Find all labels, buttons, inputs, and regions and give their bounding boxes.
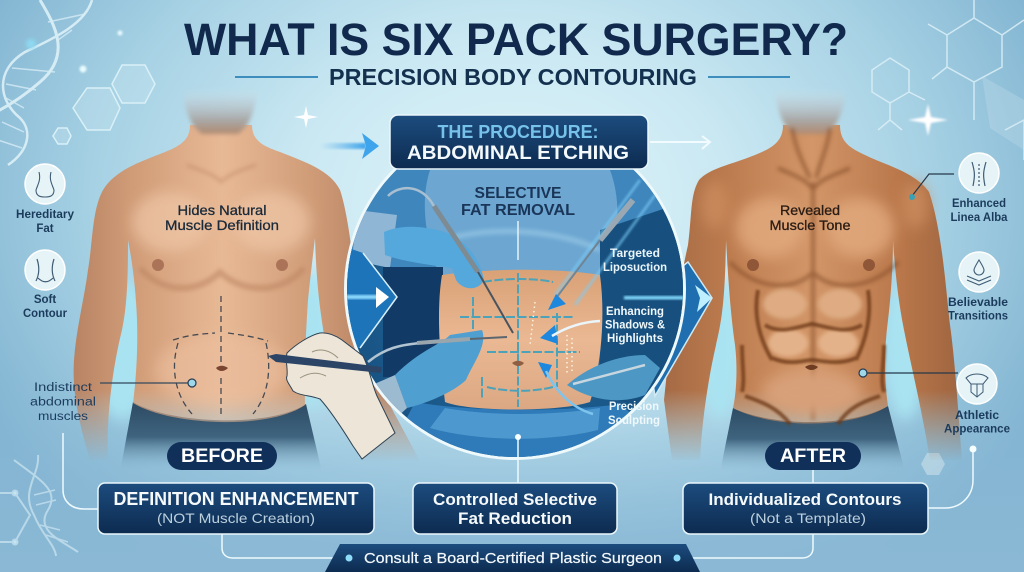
after: pants (720, 406, 905, 472)
decoration: dna helix bottom left (0, 455, 78, 556)
box: controlled selective fat reduction: Fat Reduction (458, 510, 572, 528)
left callout: soft contour: Contour (23, 308, 68, 320)
box: controlled selective fat reduction: Controlled Selective (433, 491, 597, 509)
procedure circle (344, 168, 686, 460)
procedure: pointer arrows (538, 294, 600, 414)
before: body (74, 125, 420, 462)
before badge: BEFORE (181, 446, 263, 467)
footer bar: consult surgeon (325, 544, 700, 572)
before: pants (120, 402, 322, 472)
procedure: gloved hands (384, 227, 484, 288)
decoration: glowing dots (80, 30, 122, 72)
enhancing shadows label: Shadows & (605, 318, 665, 332)
right callout: athletic appearance: Appearance (944, 424, 1010, 436)
arrow: before to procedure (320, 133, 379, 159)
box: individualized contours: Individualized Contours (708, 491, 902, 509)
footer bar: consult surgeon: Consult a Board-Certified Plastic Surgeon (364, 551, 662, 567)
arrow: procedure to after chevron (640, 262, 712, 396)
after badge: AFTER (780, 446, 846, 467)
after torso label: Revealed (780, 202, 840, 218)
before torso label: Hides Natural (178, 202, 266, 218)
enhancing shadows label: Enhancing (606, 304, 664, 318)
after: chin (775, 88, 845, 134)
title: WHAT IS SIX PACK SURGERY? (184, 14, 848, 65)
before: dashed surgical markings (173, 296, 269, 415)
right callout: enhanced linea alba: Enhanced (952, 198, 1006, 210)
left callout: hereditary fat: Hereditary (16, 209, 75, 221)
precision sculpting label: Precision (609, 399, 659, 413)
subtitle: PRECISION BODY CONTOURING (329, 64, 697, 90)
precision sculpting label: Sculpting (608, 413, 660, 427)
left callout: soft contour (23, 250, 68, 320)
box: definition enhancement: (NOT Muscle Creation) (157, 510, 315, 526)
after: chest and neck lines (730, 128, 898, 420)
selective fat removal label: SELECTIVE (474, 185, 562, 202)
procedure heading (390, 115, 648, 169)
box: individualized contours: (Not a Template) (750, 510, 866, 526)
left callout: soft contour: Soft (34, 294, 56, 306)
right callout: believable transitions (948, 252, 1008, 322)
targeted liposuction label: Liposuction (603, 260, 667, 274)
left callout: hereditary fat (16, 164, 75, 235)
after torso label: Muscle Tone (770, 217, 851, 233)
before torso label: Muscle Definition (165, 217, 279, 233)
procedure: light beams (555, 180, 655, 305)
procedure: abdomen (439, 270, 602, 410)
targeted liposuction label: Targeted (610, 246, 660, 260)
left callout: hereditary fat: Fat (36, 223, 54, 235)
after torso figure (664, 88, 962, 472)
left callout: indistinct abdominal muscles: Indistinct (34, 382, 93, 394)
left callout: indistinct abdominal muscles: abdominal (30, 396, 96, 408)
decoration: dna helix top left (0, 0, 92, 165)
procedure: instruments (388, 188, 434, 206)
selective fat removal label (461, 185, 575, 260)
box: controlled selective fat reduction (413, 483, 617, 534)
procedure: right beam (624, 296, 694, 300)
before badge (167, 442, 277, 470)
after: abdominal muscles (742, 289, 884, 424)
decoration: hexagons left (53, 65, 155, 144)
box: definition enhancement (98, 483, 374, 534)
box: individualized contours (683, 483, 928, 534)
right callout: athletic appearance (859, 364, 1010, 436)
decoration: sparkle left (294, 106, 318, 128)
selective fat removal label: FAT REMOVAL (461, 202, 575, 219)
right callout: believable transitions: Transitions (948, 310, 1008, 322)
left callout: indistinct abdominal muscles: muscles (38, 411, 88, 423)
gloved hand with marking pen (268, 333, 395, 459)
procedure: lower drape (407, 404, 630, 457)
connector lines (63, 433, 976, 558)
procedure heading: ABDOMINAL ETCHING (407, 143, 629, 164)
arrow: heading to right (650, 136, 710, 149)
box: definition enhancement: DEFINITION ENHANCEMENT (114, 489, 359, 509)
right callout: athletic appearance: Athletic (955, 410, 1000, 422)
procedure: gown (348, 170, 682, 267)
right callout: enhanced linea alba (909, 153, 1008, 224)
after badge (765, 442, 861, 470)
before torso figure (74, 88, 420, 472)
right callout: believable transitions: Believable (948, 297, 1008, 309)
before: chin (183, 88, 257, 134)
enhancing shadows label: Highlights (607, 331, 663, 345)
decoration: hexagons right (872, 0, 1024, 160)
left callout: indistinct abdominal muscles (30, 379, 196, 423)
procedure: dark side panels (383, 267, 443, 377)
decoration: small hexagon (921, 453, 945, 475)
procedure: left chevron (347, 249, 398, 348)
right callout: enhanced linea alba: Linea Alba (950, 212, 1008, 224)
decoration: sparkle right (908, 104, 948, 136)
after: body (664, 125, 962, 460)
procedure heading: THE PROCEDURE: (438, 122, 598, 142)
